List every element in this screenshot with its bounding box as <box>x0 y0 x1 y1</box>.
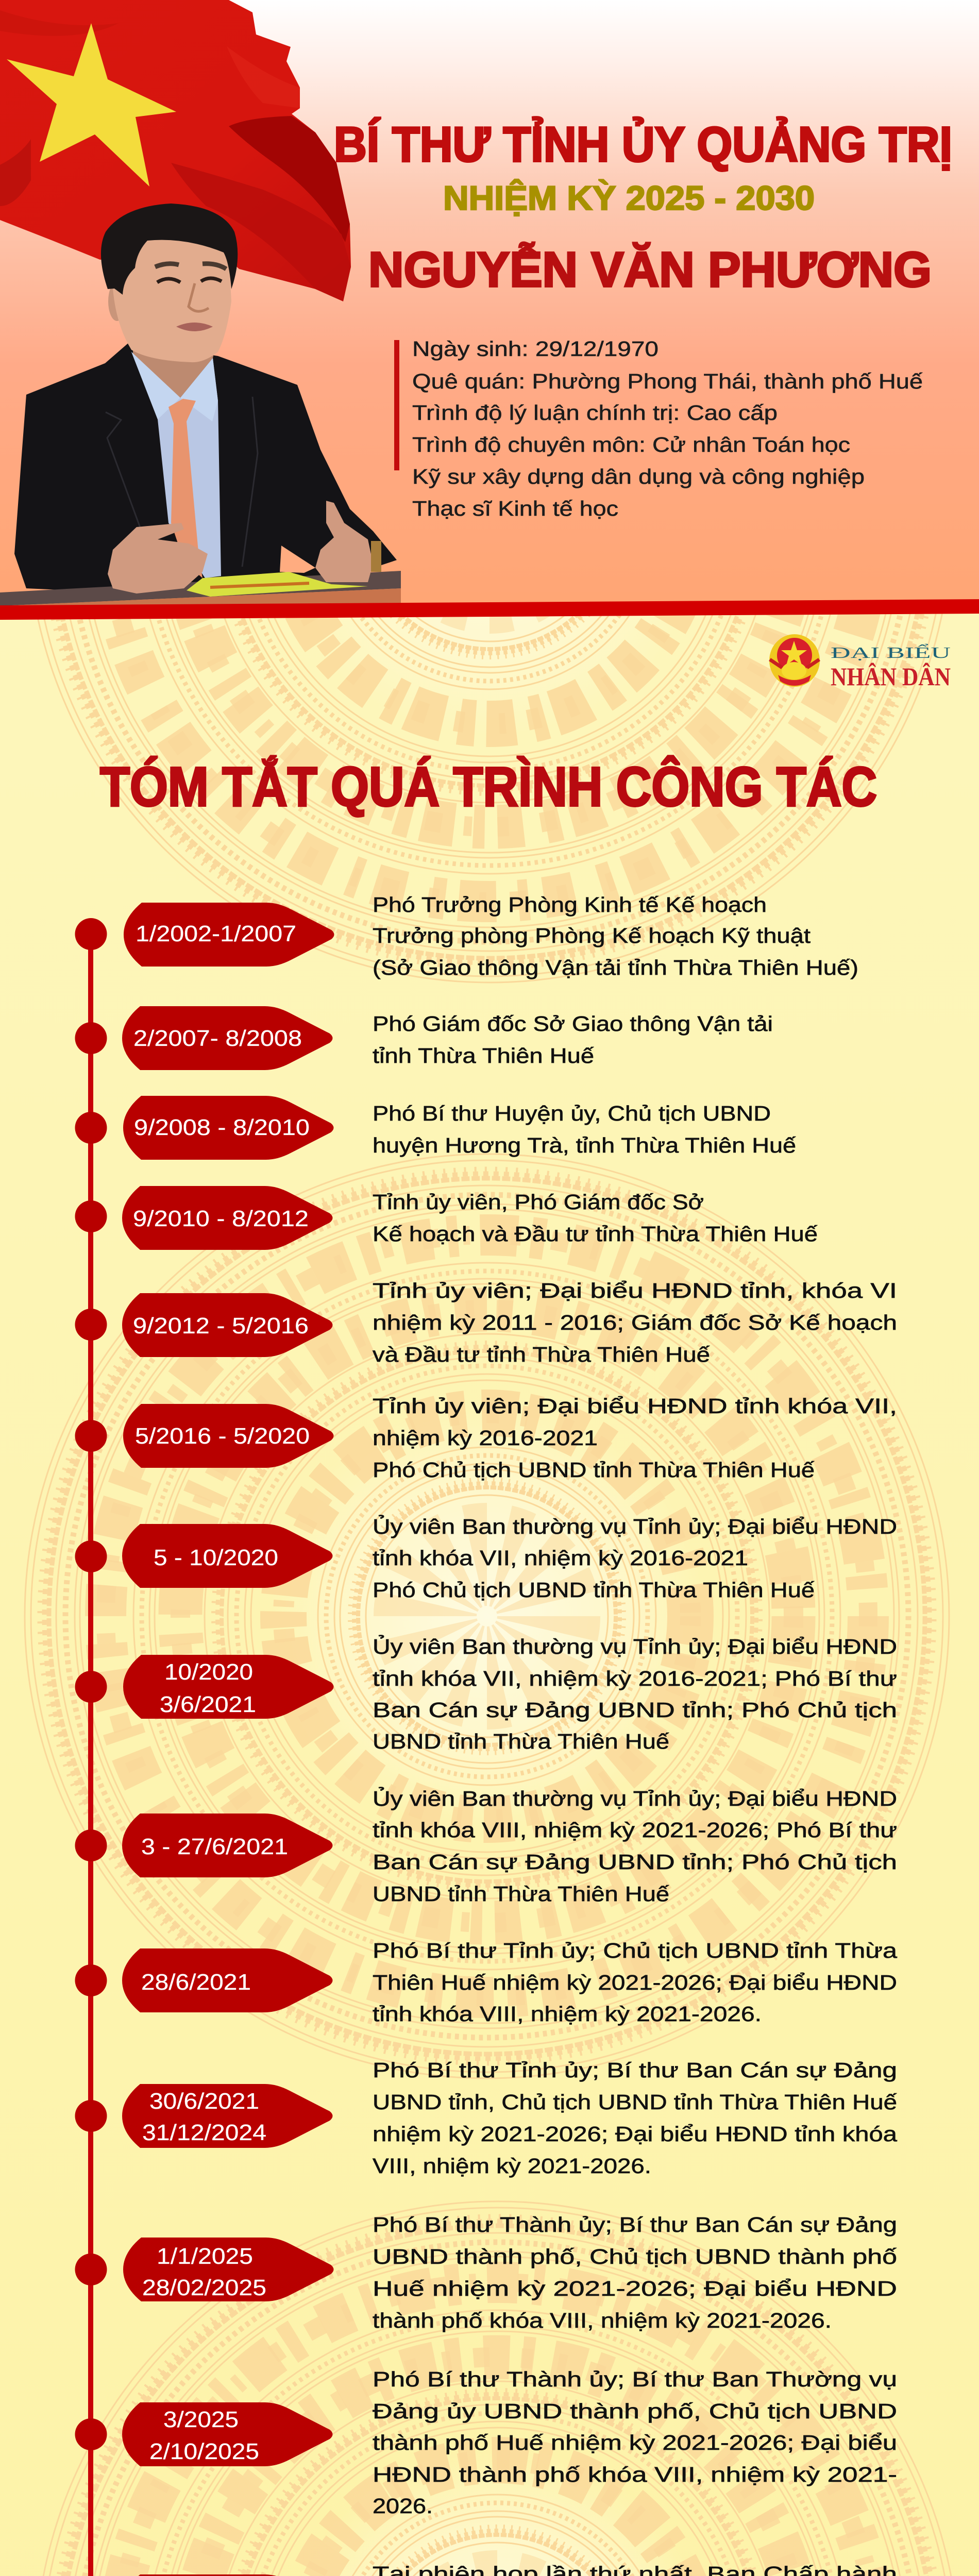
timeline item 4: Tỉnh ủy viên, Phó Giám đốc Sở <box>373 1190 704 1214</box>
timeline item 1: 1/2002-1/2007 <box>136 921 296 946</box>
timeline item 9: 3 - 27/6/2021 <box>141 1834 288 1859</box>
tie <box>168 399 202 578</box>
timeline item 9: Ủy viên Ban thường vụ Tỉnh ủy; Đại biểu HĐND <box>373 1787 897 1810</box>
subtitle: term: NHIỆM KỲ 2025 - 2030 <box>443 179 815 217</box>
timeline item 8: UBND tỉnh Thừa Thiên Huế <box>373 1730 669 1753</box>
table <box>0 571 401 606</box>
timeline item 8: 3/6/2021 <box>160 1692 256 1717</box>
timeline item 8: Ban Cán sự Đảng UBND tỉnh; Phó Chủ tịch <box>373 1698 897 1722</box>
timeline item 4: 9/2010 - 8/2012 <box>133 1206 309 1231</box>
lapel lines <box>106 397 258 567</box>
timeline item 7: Phó Chủ tịch UBND tỉnh Thừa Thiên Huế <box>373 1578 815 1602</box>
image: portrait of Nguyễn Văn Phương <box>0 204 401 609</box>
timeline item 1: Trưởng phòng Phòng Kế hoạch Kỹ thuật <box>373 924 811 947</box>
timeline item 12: Huế nhiệm kỳ 2021-2026; Đại biểu HĐND <box>373 2277 897 2300</box>
shirt <box>131 352 221 578</box>
image: red flag <box>0 0 351 301</box>
watch <box>371 541 381 572</box>
timeline item 9: tỉnh khóa VIII, nhiệm kỳ 2021-2026; Phó Bí thư <box>373 1818 897 1842</box>
timeline item 2: 2/2007- 8/2008 <box>133 1026 302 1051</box>
timeline item 13: HĐND thành phố khóa VIII, nhiệm kỳ 2021- <box>373 2463 897 2486</box>
timeline item 14 <box>75 2562 897 2576</box>
timeline axis <box>88 934 93 2576</box>
brows and eyes <box>155 264 226 269</box>
timeline item 5: nhiệm kỳ 2011 - 2016; Giám đốc Sở Kế hoạch <box>373 1311 897 1334</box>
timeline item 6: nhiệm kỳ 2016-2021 <box>373 1426 598 1450</box>
timeline item 13: 2/10/2025 <box>149 2439 259 2464</box>
timeline item 7 <box>75 1515 897 1602</box>
timeline item 5: và Đầu tư tỉnh Thừa Thiên Huế <box>373 1343 710 1366</box>
timeline item 7: Ủy viên Ban thường vụ Tỉnh ủy; Đại biểu HĐND <box>373 1515 897 1538</box>
timeline item 13: thành phố Huế nhiệm kỳ 2021-2026; Đại biểu <box>373 2431 897 2454</box>
timeline item 1 <box>75 893 858 979</box>
timeline item 6: Phó Chủ tịch UBND tỉnh Thừa Thiên Huế <box>373 1458 815 1482</box>
timeline item 1: Phó Trưởng Phòng Kinh tế Kế hoạch <box>373 893 767 917</box>
nose <box>189 283 209 311</box>
left hand <box>108 523 208 594</box>
timeline item 11: 31/12/2024 <box>142 2120 266 2145</box>
icon: flag star <box>7 23 176 187</box>
text block: biography <box>412 337 923 520</box>
vertical accent bar <box>394 340 399 470</box>
timeline item 8: tỉnh khóa VII, nhiệm kỳ 2016-2021; Phó Bí thư <box>373 1667 897 1690</box>
timeline item 3: huyện Hương Trà, tỉnh Thừa Thiên Huế <box>373 1133 796 1157</box>
timeline item 6 <box>75 1394 897 1482</box>
timeline item 3: 9/2008 - 8/2010 <box>134 1115 310 1140</box>
timeline item 5: 9/2012 - 5/2016 <box>133 1313 309 1338</box>
timeline item 10: 28/6/2021 <box>141 1970 251 1995</box>
timeline item 4: Kế hoạch và Đầu tư tỉnh Thừa Thiên Huế <box>373 1222 818 1246</box>
timeline item 12: thành phố khóa VIII, nhiệm kỳ 2021-2026. <box>373 2309 832 2332</box>
heading: career summary: TÓM TẮT QUÁ TRÌNH CÔNG TÁC <box>100 755 877 818</box>
timeline item 12: Phó Bí thư Thành ủy; Bí thư Ban Cán sự Đảng <box>373 2213 897 2236</box>
text block: biography: Trình độ chuyên môn: Cử nhân Toán học <box>412 433 850 456</box>
mouth <box>176 323 213 331</box>
timeline item 5 <box>75 1279 897 1366</box>
shirt collar <box>131 352 218 421</box>
timeline item 12: 1/1/2025 <box>157 2244 253 2269</box>
timeline item 11: Phó Bí thư Tỉnh ủy; Bí thư Ban Cán sự Đảng <box>373 2058 897 2082</box>
text block: biography: Quê quán: Phường Phong Thái, thành phố Huế <box>412 369 923 393</box>
timeline item 13: 3/2025 <box>163 2407 239 2432</box>
red header band <box>0 599 979 620</box>
ear <box>108 282 126 321</box>
text block: biography: Trình độ lý luận chính trị: Cao cấp <box>412 401 778 425</box>
logo: Đại biểu Nhân dân: ĐẠI BIỂU <box>831 643 951 662</box>
logo: Đại biểu Nhân dân: NHÂN DÂN <box>831 662 951 691</box>
icon: national emblem <box>769 634 820 687</box>
papers <box>187 572 368 597</box>
right hand <box>315 501 373 582</box>
timeline item 8: 10/2020 <box>164 1659 253 1685</box>
timeline item 2: tỉnh Thừa Thiên Huế <box>373 1044 594 1067</box>
timeline item 2: Phó Giám đốc Sở Giao thông Vận tải <box>373 1012 773 1036</box>
timeline item 9: UBND tỉnh Thừa Thiên Huế <box>373 1882 669 1906</box>
timeline item 13: Đảng ủy UBND thành phố, Chủ tịch UBND <box>373 2399 897 2423</box>
timeline item 11 <box>75 2058 897 2178</box>
face <box>113 236 231 362</box>
timeline item 6: 5/2016 - 5/2020 <box>135 1423 310 1449</box>
text block: biography: Thạc sĩ Kinh tế học <box>412 497 618 520</box>
timeline item 7: tỉnh khóa VII, nhiệm kỳ 2016-2021 <box>373 1546 748 1570</box>
timeline item 9 <box>75 1787 897 1906</box>
panel: header <box>0 0 979 609</box>
text block: biography: Ngày sinh: 29/12/1970 <box>412 337 659 361</box>
name: NGUYỄN VĂN PHƯƠNG <box>368 242 932 297</box>
timeline item 10 <box>75 1939 897 2026</box>
timeline item 3: Phó Bí thư Huyện ủy, Chủ tịch UBND <box>373 1101 771 1125</box>
timeline item 12 <box>75 2213 897 2332</box>
timeline item 13: Phó Bí thư Thành ủy; Bí thư Ban Thường vụ <box>373 2367 897 2391</box>
timeline item 12: 28/02/2025 <box>142 2275 266 2300</box>
timeline item 12: UBND thành phố, Chủ tịch UBND thành phố <box>373 2245 897 2268</box>
suit jacket <box>14 343 397 592</box>
timeline item 3 <box>75 1096 796 1160</box>
timeline item 1: (Sở Giao thông Vận tải tỉnh Thừa Thiên Huế) <box>373 956 858 979</box>
hair <box>101 204 238 295</box>
timeline item 2 <box>75 1006 773 1070</box>
timeline item 7: 5 - 10/2020 <box>154 1545 278 1570</box>
timeline item 11: nhiệm kỳ 2021-2026; Đại biểu HĐND tỉnh khóa <box>373 2122 897 2146</box>
timeline item 10: Phó Bí thư Tỉnh ủy; Chủ tịch UBND tỉnh Thừa <box>373 1939 897 1962</box>
timeline item 11: UBND tỉnh, Chủ tịch UBND tỉnh Thừa Thiên Huế <box>373 2090 897 2114</box>
timeline item 8 <box>75 1635 897 1753</box>
timeline item 13 <box>75 2367 897 2518</box>
neck <box>133 343 216 398</box>
timeline item 10: tỉnh khóa VIII, nhiệm kỳ 2021-2026. <box>373 2002 762 2026</box>
timeline item 5: Tỉnh ủy viên; Đại biểu HĐND tỉnh, khóa VI <box>373 1279 897 1302</box>
gap between arm and torso <box>280 546 315 573</box>
logo: Đại biểu Nhân dân <box>769 634 951 691</box>
timeline item 4 <box>75 1186 818 1250</box>
text block: biography: Kỹ sư xây dựng dân dụng và công nghiệp <box>412 465 865 488</box>
timeline item 11: VIII, nhiệm kỳ 2021-2026. <box>373 2154 651 2178</box>
timeline item 9: Ban Cán sự Đảng UBND tỉnh; Phó Chủ tịch <box>373 1850 897 1874</box>
timeline item 10: Thiên Huế nhiệm kỳ 2021-2026; Đại biểu HĐND <box>373 1971 897 1994</box>
timeline item 8: Ủy viên Ban thường vụ Tỉnh ủy; Đại biểu HĐND <box>373 1635 897 1658</box>
timeline item 11: 30/6/2021 <box>149 2089 259 2114</box>
timeline item 6: Tỉnh ủy viên; Đại biểu HĐND tỉnh khóa VII, <box>373 1394 897 1418</box>
timeline item 13: 2026. <box>373 2494 433 2518</box>
